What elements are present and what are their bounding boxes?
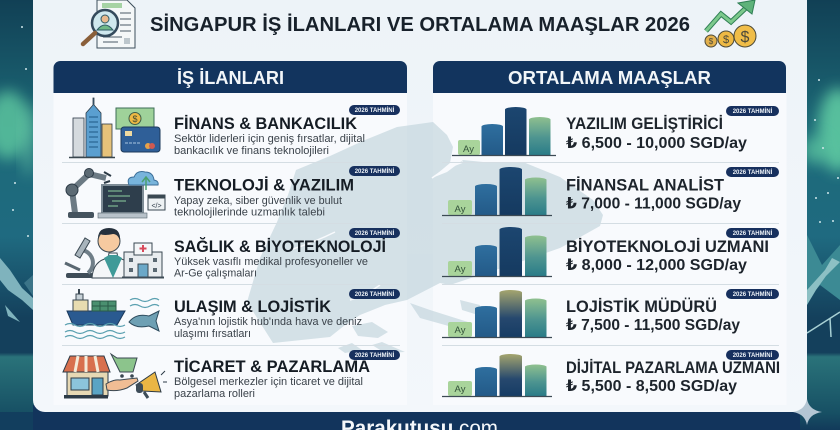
bar chart: Ay bbox=[455, 384, 466, 395]
salary row: digital marketing specialist: DİJİTAL PAZARLAMA UZMANI bbox=[566, 359, 780, 377]
bar chart bbox=[452, 107, 556, 156]
job row: finance: 2026 TAHMİNİ bbox=[355, 107, 395, 114]
salary row: financial analyst: ₺ 7,000 - 11,000 SGD/ay bbox=[566, 196, 741, 212]
icon: buildings, banknote and card bbox=[69, 98, 160, 158]
salary row: financial analyst: FİNANSAL ANALİST bbox=[566, 176, 724, 194]
salary row: biotechnology specialist: BİYOTEKNOLOJİ UZMANI bbox=[566, 238, 769, 256]
job row: commerce bbox=[63, 350, 400, 400]
icon: cargo ship, waves and fish bbox=[65, 289, 159, 338]
job row: technology bbox=[66, 166, 400, 218]
panel heading: İş İlanları: İŞ İLANLARI bbox=[177, 68, 284, 88]
job row: healthcare: Yüksek vasıflı medikal profesyoneller ve bbox=[174, 256, 368, 268]
bar chart bbox=[442, 354, 552, 396]
salary row: software developer: 2026 TAHMİNİ bbox=[733, 108, 773, 115]
job row: technology: Yapay zeka, siber güvenlik ve bulut bbox=[174, 195, 342, 207]
row backing: right panel bbox=[433, 93, 786, 405]
icon: microscope, doctor and hospital bbox=[65, 228, 164, 278]
job row: commerce: 2026 TAHMİNİ bbox=[355, 352, 395, 359]
bar chart: Ay bbox=[455, 264, 466, 275]
bar chart bbox=[442, 227, 552, 276]
job row: healthcare bbox=[65, 228, 400, 280]
job row: finance bbox=[69, 98, 400, 158]
bar chart bbox=[442, 167, 552, 216]
icon: document with magnifier bbox=[83, 0, 135, 48]
job row: logistics: ulaşımı fırsatları bbox=[174, 328, 251, 340]
salary row: logistics manager: ₺ 7,500 - 11,500 SGD/ay bbox=[566, 317, 740, 334]
job row: finance: bankacılık ve finans teknolojileri bbox=[174, 145, 329, 157]
panel heading: Ortalama Maaşlar: ORTALAMA MAAŞLAR bbox=[508, 68, 711, 88]
footer band bbox=[0, 405, 800, 430]
job row: logistics: Asya'nın lojistik hub'ında hava ve deniz bbox=[174, 316, 362, 328]
icon: growth arrow and coins: $ bbox=[741, 29, 750, 46]
job row: logistics: 2026 TAHMİNİ bbox=[355, 291, 395, 298]
salary row: biotechnology specialist: ₺ 8,000 - 12,000 SGD/ay bbox=[566, 257, 747, 274]
job row: commerce: TİCARET & PAZARLAMA bbox=[174, 357, 370, 376]
icon: robot arm, laptop, cloud and code window bbox=[66, 168, 165, 218]
job row: technology: teknolojilerinde uzmanlık talebi bbox=[174, 206, 325, 218]
bar chart: Ay bbox=[455, 204, 466, 215]
icon: shop, cart, hand and megaphone bbox=[63, 354, 167, 398]
salary row: biotechnology specialist bbox=[442, 227, 779, 276]
icon: growth arrow and coins: $ bbox=[709, 37, 714, 46]
job row: logistics bbox=[65, 289, 400, 340]
background map of Singapore bbox=[247, 122, 603, 353]
salary row: software developer: YAZILIM GELİŞTİRİCİ bbox=[566, 115, 723, 133]
job row: technology: 2026 TAHMİNİ bbox=[355, 168, 395, 175]
job row: finance: FİNANS & BANKACILIK bbox=[174, 114, 358, 133]
icon: sparkle star bbox=[793, 399, 822, 425]
bar chart: Ay bbox=[455, 325, 466, 336]
icon: growth arrow and coins: $ bbox=[723, 34, 729, 46]
salary row: logistics manager: LOJİSTİK MÜDÜRÜ bbox=[566, 297, 717, 316]
job row: commerce: pazarlama rolleri bbox=[174, 388, 255, 400]
job row: logistics: ULAŞIM & LOJİSTİK bbox=[174, 297, 332, 316]
job row: healthcare: SAĞLIK & BİYOTEKNOLOJİ bbox=[174, 237, 386, 256]
title: SİNGAPUR İŞ İLANLARI VE ORTALAMA MAAŞLAR 2026 bbox=[150, 13, 690, 36]
bar chart: Ay bbox=[463, 144, 474, 155]
salary row: digital marketing specialist: ₺ 5,500 - 8,500 SGD/ay bbox=[566, 378, 737, 395]
row backing: left panel bbox=[54, 93, 407, 405]
salary row: software developer: ₺ 6,500 - 10,000 SGD/ay bbox=[566, 135, 747, 152]
job row: technology: TEKNOLOJİ & YAZILIM bbox=[174, 176, 354, 194]
salary row: financial analyst bbox=[442, 167, 779, 216]
map channels bbox=[290, 162, 463, 300]
salary row: financial analyst: 2026 TAHMİNİ bbox=[733, 169, 773, 176]
salary row: logistics manager: 2026 TAHMİNİ bbox=[733, 291, 773, 298]
icon: growth arrow and coins bbox=[705, 0, 756, 47]
salary row: logistics manager bbox=[442, 289, 779, 338]
salary row: biotechnology specialist: 2026 TAHMİNİ bbox=[733, 230, 773, 237]
salary row: digital marketing specialist bbox=[442, 350, 780, 396]
job row: healthcare: Ar-Ge çalışmaları bbox=[174, 268, 257, 280]
panel heading: İş İlanları bbox=[54, 61, 407, 93]
bar chart bbox=[442, 290, 552, 338]
job row: commerce: Bölgesel merkezler için ticaret ve dijital bbox=[174, 376, 363, 388]
job row: finance: Sektör liderleri için geniş fırsatlar, dijital bbox=[174, 133, 365, 145]
salary row: digital marketing specialist: 2026 TAHMİNİ bbox=[733, 352, 773, 359]
icon: buildings, banknote and card: $ bbox=[132, 114, 138, 124]
icon: robot arm, laptop, cloud and code window: </> bbox=[151, 203, 162, 210]
panel heading: Ortalama Maaşlar bbox=[433, 61, 786, 93]
salary row: software developer bbox=[452, 106, 779, 156]
job row: healthcare: 2026 TAHMİNİ bbox=[355, 230, 395, 237]
